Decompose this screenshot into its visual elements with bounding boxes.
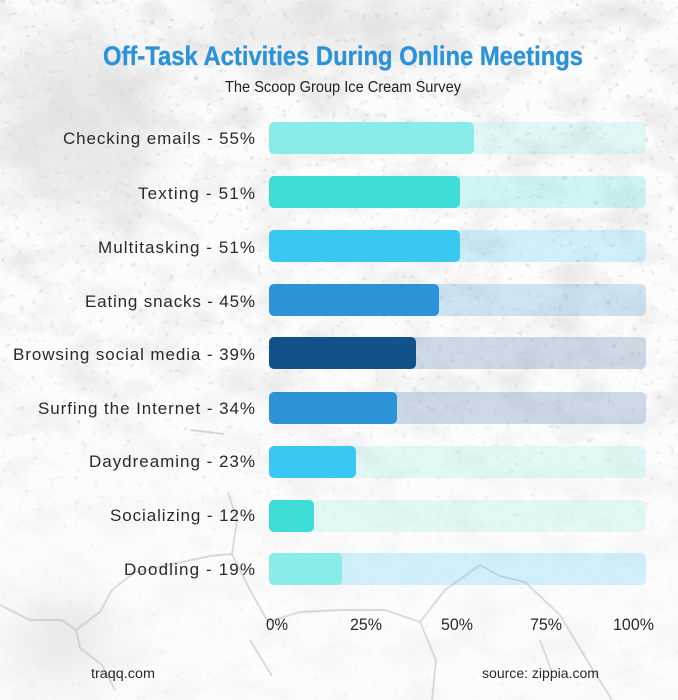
row: Browsing social media (13, 337, 646, 369)
subtitle: The Scoop Group Ice Cream Survey (225, 79, 461, 96)
axis labels: 0% (266, 615, 288, 634)
row: Daydreaming (89, 446, 646, 478)
row: Doodling (124, 553, 646, 585)
row: Multitasking (98, 230, 646, 262)
row: Socializing (110, 500, 646, 532)
row: Checking emails: Checking emails - 55% (63, 129, 255, 148)
row: Texting: Texting - 51% (138, 184, 255, 203)
axis labels (266, 615, 654, 634)
row: Socializing: Socializing - 12% (110, 506, 255, 525)
row: Eating snacks: Eating snacks - 45% (85, 292, 255, 311)
footer: site: traqq.com (91, 665, 155, 681)
row: Daydreaming: Daydreaming - 23% (89, 452, 255, 471)
title: Off-Task Activities During Online Meetings (103, 41, 583, 71)
row: Checking emails (63, 122, 646, 154)
row: Doodling: Doodling - 19% (124, 560, 255, 579)
row: Surfing the Internet (38, 392, 646, 424)
row: Eating snacks (85, 284, 646, 316)
axis labels: 75% (530, 615, 562, 634)
row: Surfing the Internet: Surfing the Internet - 34% (38, 399, 255, 418)
bar chart (13, 122, 646, 585)
row: Multitasking: Multitasking - 51% (98, 238, 255, 257)
axis labels: 100% (613, 615, 654, 634)
row: Texting (138, 176, 646, 208)
axis labels: 25% (350, 615, 382, 634)
row: Browsing social media: Browsing social media - 39% (13, 345, 255, 364)
axis labels: 50% (441, 615, 473, 634)
footer: source: source: zippia.com (482, 665, 599, 681)
